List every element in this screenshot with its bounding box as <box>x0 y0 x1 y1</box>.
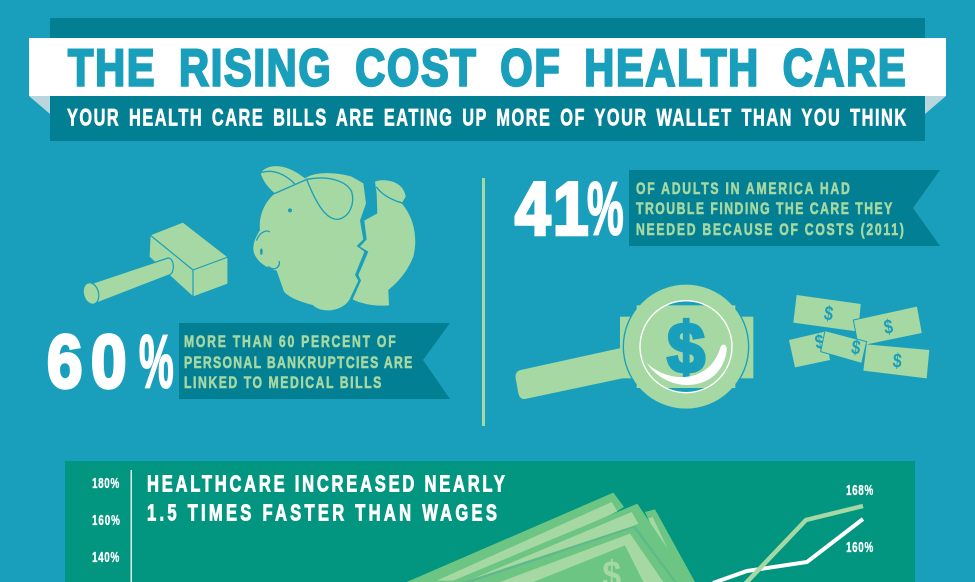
axis labels: 180% <box>92 475 119 492</box>
icon: broken piggy bank <box>253 166 415 310</box>
icon: magnifying glass over a bill <box>516 284 753 409</box>
header banner <box>29 18 946 141</box>
ribbon: adults: NEEDED BECAUSE OF COSTS (2011) <box>636 221 904 240</box>
stat: 41 percent <box>515 166 624 251</box>
icon: scattered dollar bills: $ <box>823 302 835 325</box>
stat: 41 percent: % <box>587 166 624 251</box>
panel: healthcare vs wages chart <box>65 461 915 582</box>
ribbon fold right <box>925 96 946 114</box>
ribbon: bankruptcies <box>179 323 450 399</box>
stat: 60 percent: 0 <box>91 320 126 404</box>
icon: scattered dollar bills <box>789 295 929 378</box>
ribbon fold left <box>29 96 50 114</box>
divider <box>482 178 485 426</box>
ribbon: bankruptcies: MORE THAN 60 PERCENT OF <box>184 333 396 352</box>
ribbon: adults: TROUBLE FINDING THE CARE THEY <box>636 200 892 219</box>
stat: 60 percent: % <box>139 320 174 404</box>
axis labels: 140% <box>92 549 119 566</box>
stat: 60 percent <box>47 320 174 404</box>
icon: magnifying glass over a bill: $ <box>667 308 705 388</box>
chart heading: 1.5 TIMES FASTER THAN WAGES <box>147 501 497 526</box>
label: 168 percent: 168% <box>846 482 873 499</box>
chart axis <box>130 470 132 582</box>
ribbon: adults: OF ADULTS IN AMERICA HAD <box>636 180 850 199</box>
axis labels: 160% <box>92 512 120 529</box>
line: healthcare costs <box>745 506 863 582</box>
icon: scattered dollar bills: $ <box>882 315 894 338</box>
ribbon: bankruptcies: PERSONAL BANKRUPTCIES ARE <box>184 354 412 373</box>
panel background <box>65 461 915 582</box>
white title ribbon <box>29 38 946 96</box>
subtitle: YOUR HEALTH CARE BILLS ARE EATING UP MORE OF YOUR WALLET THAN YOU THINK <box>67 104 906 131</box>
chart heading: HEALTHCARE INCREASED NEARLY <box>147 472 505 497</box>
chart heading <box>147 472 505 526</box>
icon: hammer <box>81 222 228 306</box>
title: THE RISING COST OF HEALTH CARE <box>68 38 906 97</box>
ribbon: adults <box>629 170 940 246</box>
icon: scattered dollar bills: $ <box>850 336 862 359</box>
icon: scattered dollar bills: $ <box>892 349 903 372</box>
icon: scattered dollar bills: $ <box>813 330 826 353</box>
stat: 60 percent: 6 <box>47 320 82 404</box>
header dark band <box>50 18 925 141</box>
icon: fan of money <box>407 493 695 582</box>
axis labels <box>92 475 120 566</box>
label: 160 percent: 160% <box>846 539 873 556</box>
stat: 41 percent: 4 <box>515 167 551 251</box>
stat: 41 percent: 1 <box>553 167 588 251</box>
ribbon: bankruptcies: LINKED TO MEDICAL BILLS <box>184 374 381 393</box>
line: wages <box>713 519 863 582</box>
